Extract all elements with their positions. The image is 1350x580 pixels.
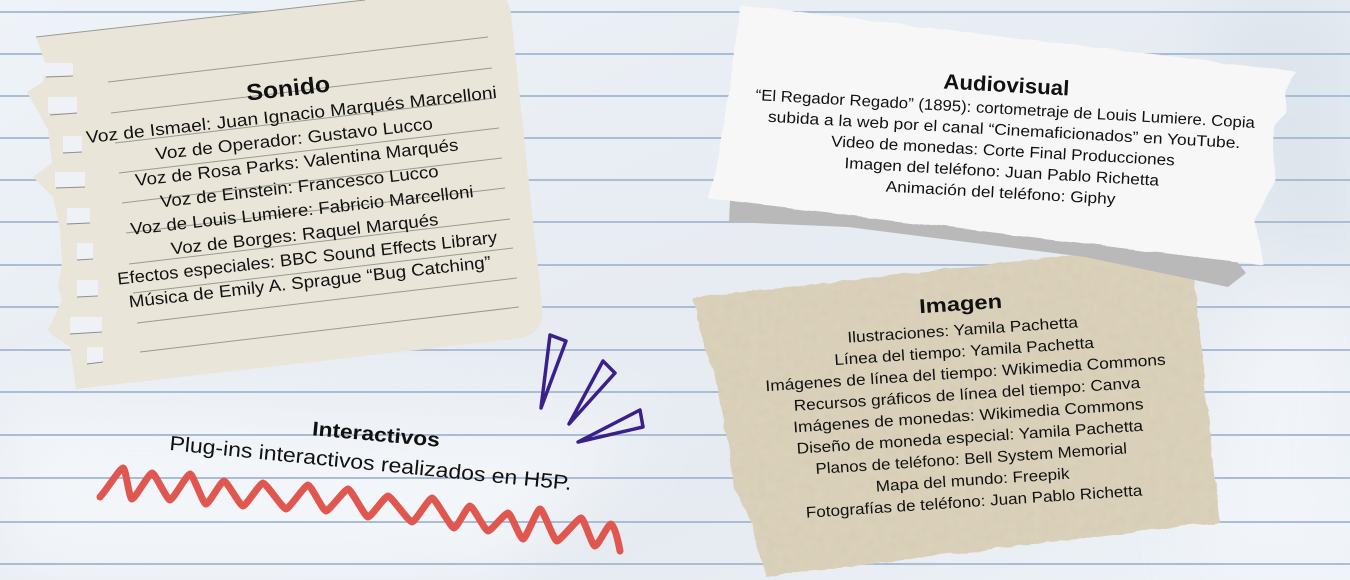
panel: imagen note [692,252,1220,577]
torn white paper [708,5,1297,265]
sonido credits text: Música de Emily A. Sprague “Bug Catching” [128,253,492,311]
sonido credits text: Voz de Ismael: Juan Ignacio Marqués Marcelloni [85,83,498,147]
torn notebook paper [27,0,543,389]
heading: Sonido: Sonido [245,71,331,106]
sonido credits text [85,83,516,314]
sonido credits text: Efectos especiales: BBC Sound Effects Library [116,228,499,289]
heading: Audiovisual: Audiovisual [943,71,1070,101]
sonido credits text: Voz de Einstein: Francesco Lucco [159,162,439,211]
sonido credits text: Voz de Rosa Parks: Valentina Marqués [134,135,459,190]
audiovisual credits text: Video de monedas: Corte Final Producciones [831,133,1175,170]
sonido credits text: Voz de Louis Lumiere: Fabricio Marcelloni [129,182,474,239]
audiovisual credits text: “El Regador Regado” (1895): cortometraje de Louis Lumiere. Copia [755,87,1256,132]
red squiggle underline [100,468,620,551]
sonido credits text: Voz de Borges: Raquel Marqués [170,210,439,259]
panel: sonido note [27,0,543,389]
heading: Interactivos: Interactivos [311,418,441,452]
heading: Imagen: Imagen [918,291,1003,318]
torn kraft paper [692,252,1220,577]
audiovisual credits text [750,87,1256,216]
audiovisual credits text: Imagen del teléfono: Juan Pablo Richetta [844,155,1160,190]
imagen credits text: Imágenes de línea del tiempo: Wikimedia Commons [765,352,1166,395]
imagen credits text [762,309,1175,524]
imagen credits text: Mapa del mundo: Freepik [875,466,1070,496]
imagen credits text: Recursos gráficos de línea del tiempo: Canva [793,375,1141,415]
audiovisual credits text: subida a la web por el canal “Cinemaficionados” en YouTube. [767,109,1241,152]
interactivos description: Plug-ins interactivos realizados en H5P. [169,432,573,495]
panel: audiovisual note [708,5,1297,287]
imagen credits text: Planos de teléfono: Bell System Memorial [815,440,1127,478]
icon: purple accent triangles [541,335,643,442]
panel: interactivos [169,418,573,495]
sonido credits text: Voz de Operador: Gustavo Lucco [154,114,434,164]
imagen credits text: Fotografías de teléfono: Juan Pablo Richetta [805,482,1143,522]
imagen credits text: Diseño de moneda especial: Yamila Pachetta [796,418,1144,458]
audiovisual credits text: Animación del teléfono: Giphy [885,178,1116,208]
imagen credits text: Ilustraciones: Yamila Pachetta [847,314,1079,347]
imagen credits text: Línea del tiempo: Yamila Pachetta [834,335,1095,369]
imagen credits text: Imágenes de monedas: Wikimedia Commons [793,396,1144,436]
gray paper shadow [729,200,1246,287]
